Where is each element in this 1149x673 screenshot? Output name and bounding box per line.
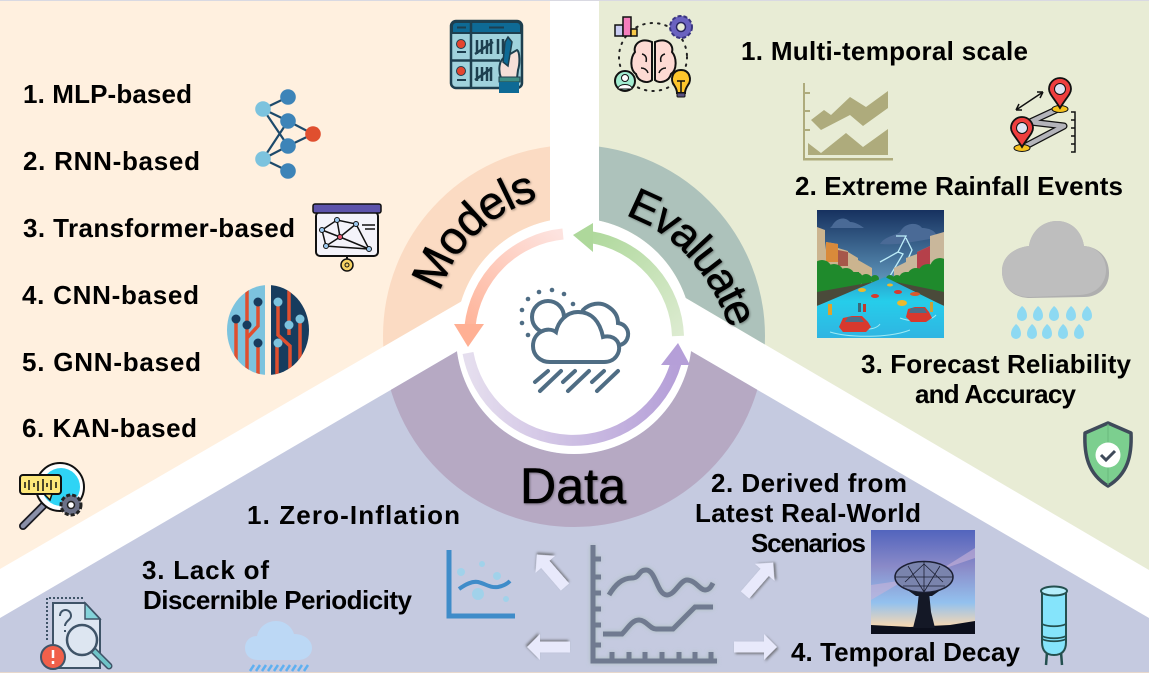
icon: shield check xyxy=(1085,423,1131,486)
item: Multi-temporal scale: 1. Multi-temporal scale xyxy=(741,36,1028,66)
icon: map route with pins xyxy=(1011,78,1075,152)
panel: Models xyxy=(0,1,550,569)
arrow: right to temporal decay xyxy=(734,634,777,660)
item: GNN-based: 5. GNN-based xyxy=(22,347,201,377)
arrow: up-right to real-world scenarios xyxy=(735,554,783,604)
item: Extreme Rainfall Events: 2. Extreme Rainfall Events xyxy=(795,171,1123,201)
icon: brain cycle xyxy=(615,16,692,97)
icon: rain cloud xyxy=(1002,221,1109,339)
icon: double area chart xyxy=(803,83,893,160)
item: Temporal Decay: 4. Temporal Decay xyxy=(791,637,1021,667)
icon: presentation board xyxy=(313,204,381,271)
item: Lack of Discernible Periodicity: 3. Lack of xyxy=(142,555,269,585)
image: radio telescope at dusk xyxy=(871,530,975,634)
icon: light blue rain cloud xyxy=(245,621,312,671)
item: Forecast Reliability and Accuracy xyxy=(861,349,1132,409)
image: flooded city street in a storm xyxy=(812,210,950,338)
item: KAN-based: 6. KAN-based xyxy=(22,413,197,443)
item: Derived from Latest Real-World Scenarios: Latest Real-World xyxy=(695,498,921,528)
heading: Data: Data xyxy=(520,458,626,514)
item: Lack of Discernible Periodicity: Discernible Periodicity xyxy=(143,585,413,615)
item: Derived from Latest Real-World Scenarios: 2. Derived from xyxy=(711,468,907,498)
panel: Data xyxy=(0,351,1149,672)
centre: forecasting cycle xyxy=(454,218,692,454)
item: Transformer-based: 3. Transformer-based xyxy=(23,213,295,243)
icon: document inspection xyxy=(41,598,109,669)
item: Zero-Inflation: 1. Zero-Inflation xyxy=(247,500,460,530)
item: RNN-based: 2. RNN-based xyxy=(23,146,200,176)
item: MLP-based: 1. MLP-based xyxy=(23,79,192,109)
icon: data board with hand xyxy=(451,21,522,93)
arrow: models segment xyxy=(454,234,563,347)
icon: magnifier with gear xyxy=(20,463,84,526)
heading: Models: Models xyxy=(412,177,538,290)
icon: rain gauge xyxy=(1041,586,1067,665)
item: CNN-based: 4. CNN-based xyxy=(22,280,199,310)
heading: Evaluate: Evaluate xyxy=(628,188,751,328)
arrow: left to periodicity xyxy=(527,634,570,660)
item: Derived from Latest Real-World Scenarios xyxy=(695,468,921,558)
chart: central time series xyxy=(593,545,717,661)
item: Forecast Reliability and Accuracy: 3. Forecast Reliability xyxy=(861,349,1132,379)
arrow: up-left to zero-inflation xyxy=(527,546,575,596)
item: Derived from Latest Real-World Scenarios: Scenarios xyxy=(751,528,866,558)
item: Lack of Discernible Periodicity xyxy=(142,555,413,615)
panel: Evaluate xyxy=(599,1,1149,570)
arrow: evaluate segment xyxy=(573,223,678,336)
icon: sparse scatter chart xyxy=(449,550,515,616)
icon: circuit brain xyxy=(227,285,309,375)
icon: sun, clouds and rain xyxy=(520,288,628,391)
icon: neural network xyxy=(255,89,321,179)
item: Forecast Reliability and Accuracy: and Accuracy xyxy=(915,379,1077,409)
arrow: data segment xyxy=(468,343,690,440)
